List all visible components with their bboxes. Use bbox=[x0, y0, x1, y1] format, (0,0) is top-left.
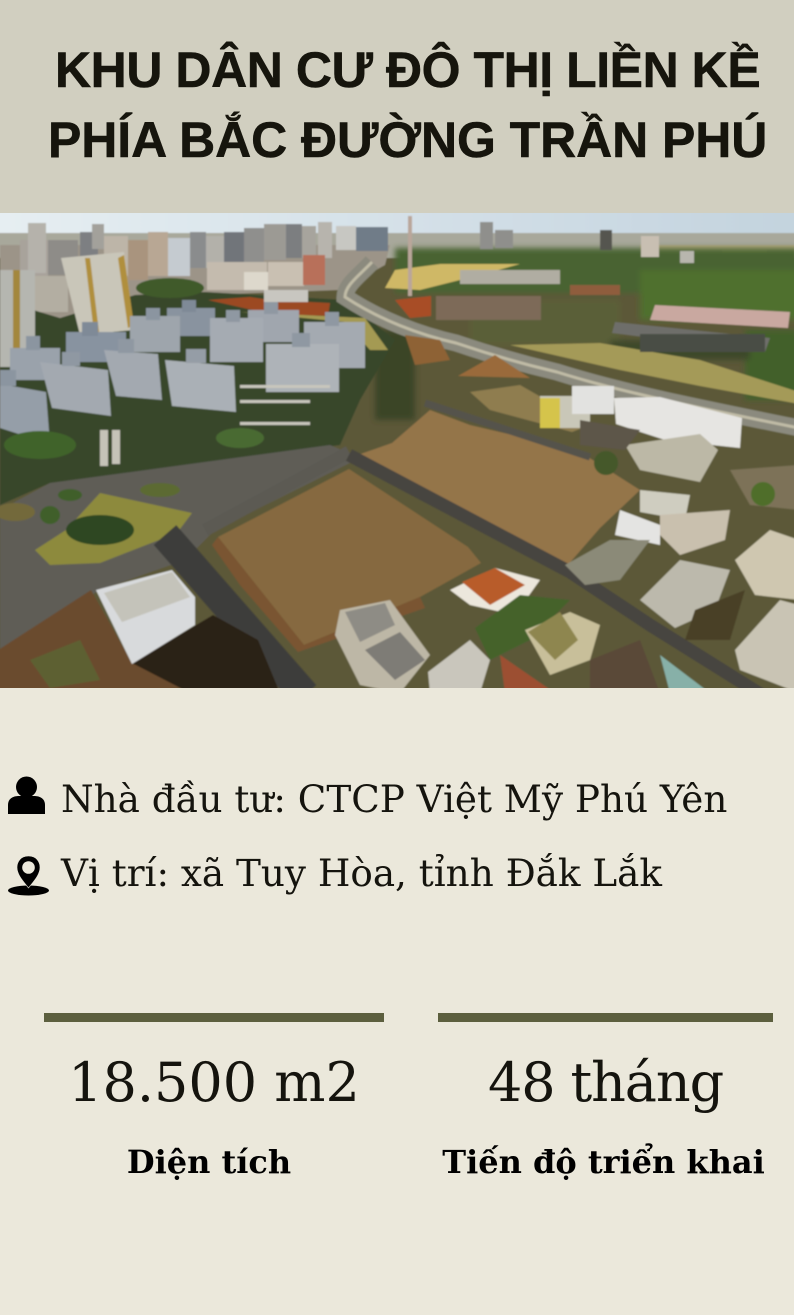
mid field near highway bbox=[470, 385, 590, 432]
apartment blocks bbox=[0, 300, 365, 444]
yellow meadow bbox=[385, 264, 520, 290]
distant towers on the right bbox=[480, 222, 694, 263]
red soil patch bbox=[208, 297, 330, 316]
divider bar bbox=[44, 1013, 384, 1022]
antenna mast bbox=[408, 216, 412, 296]
dense city backdrop bbox=[0, 245, 390, 320]
palm trees at roundabout bbox=[0, 483, 180, 545]
skyline of towers bbox=[20, 222, 388, 312]
greenery at right bbox=[375, 248, 794, 420]
area label: Diện tích bbox=[127, 1143, 291, 1181]
highway bbox=[345, 262, 794, 428]
icon: map pin bbox=[8, 856, 49, 896]
header band bbox=[0, 0, 794, 213]
industrial buildings on the right bbox=[612, 305, 790, 352]
schedule value: 48 tháng bbox=[488, 1051, 723, 1114]
courtyard paths and trees bbox=[4, 278, 330, 466]
road network bbox=[165, 403, 770, 700]
title line 2: PHÍA BẮC ĐƯỜNG TRẦN PHÚ bbox=[48, 112, 767, 168]
area value: 18.500 m2 bbox=[68, 1051, 360, 1114]
investor text: Nhà đầu tư: CTCP Việt Mỹ Phú Yên bbox=[61, 777, 727, 821]
white warehouse bbox=[96, 570, 195, 664]
lower-left soil lot bbox=[0, 590, 190, 693]
icon: person bbox=[8, 776, 45, 814]
main empty lot bbox=[218, 469, 481, 645]
white houses and warehouses upper right bbox=[540, 386, 742, 482]
dark green ground around apartment blocks bbox=[0, 292, 395, 505]
location row bbox=[8, 851, 662, 896]
tall residential towers bbox=[0, 252, 134, 367]
grey road surface around the roundabout bbox=[0, 445, 360, 650]
houses along the right edge bbox=[565, 465, 794, 693]
lawn beside highway bbox=[510, 343, 794, 404]
photo content bbox=[0, 208, 794, 700]
base ground bbox=[0, 258, 794, 693]
divider bar bbox=[438, 1013, 773, 1022]
embankment earth bbox=[405, 335, 450, 365]
houses along the bottom bbox=[335, 568, 710, 693]
stat: area bbox=[44, 1013, 384, 1181]
stat: schedule bbox=[438, 1013, 773, 1181]
distant landscape bbox=[0, 233, 794, 263]
red soil edge of main lot bbox=[212, 537, 425, 652]
sky bbox=[0, 208, 794, 236]
investor row bbox=[8, 776, 727, 821]
title line 1: KHU DÂN CƯ ĐÔ THỊ LIỀN KỀ bbox=[55, 42, 760, 98]
aerial photo of the site bbox=[0, 213, 794, 688]
upper empty lot bbox=[349, 410, 640, 566]
grassy roundabout bbox=[35, 493, 192, 565]
lawn near blocks bbox=[240, 312, 388, 350]
tree by warehouse bbox=[594, 451, 618, 475]
location text: Vị trí: xã Tuy Hòa, tỉnh Đắk Lắk bbox=[61, 851, 662, 895]
low-rise housing strip bbox=[395, 270, 620, 320]
schedule label: Tiến độ triển khai bbox=[442, 1143, 765, 1181]
